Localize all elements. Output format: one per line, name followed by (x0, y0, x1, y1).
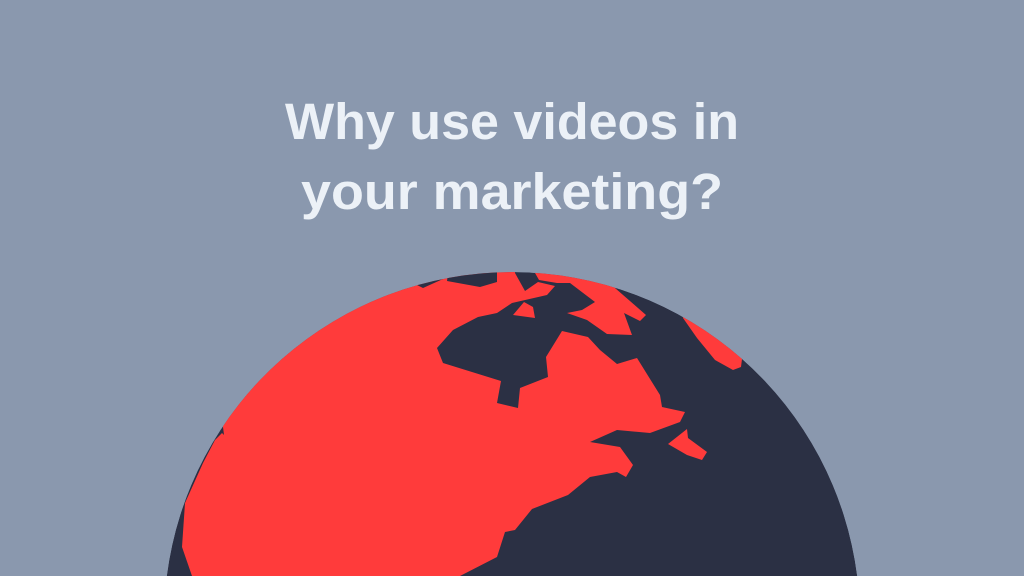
title: Why use videos in (285, 93, 739, 150)
continent: northeast landmass (535, 272, 646, 335)
island: southeast (668, 429, 707, 460)
island: inland sea (513, 302, 535, 318)
globe illustration (150, 250, 857, 576)
globe ocean (167, 272, 857, 576)
top coast dark patch (417, 279, 443, 288)
island: eastern strip (682, 317, 742, 370)
title (285, 93, 739, 220)
top coast dark patch (447, 272, 497, 287)
infographic canvas (166, 102, 858, 576)
title: your marketing? (301, 163, 723, 220)
continent: main landmass (182, 272, 685, 576)
